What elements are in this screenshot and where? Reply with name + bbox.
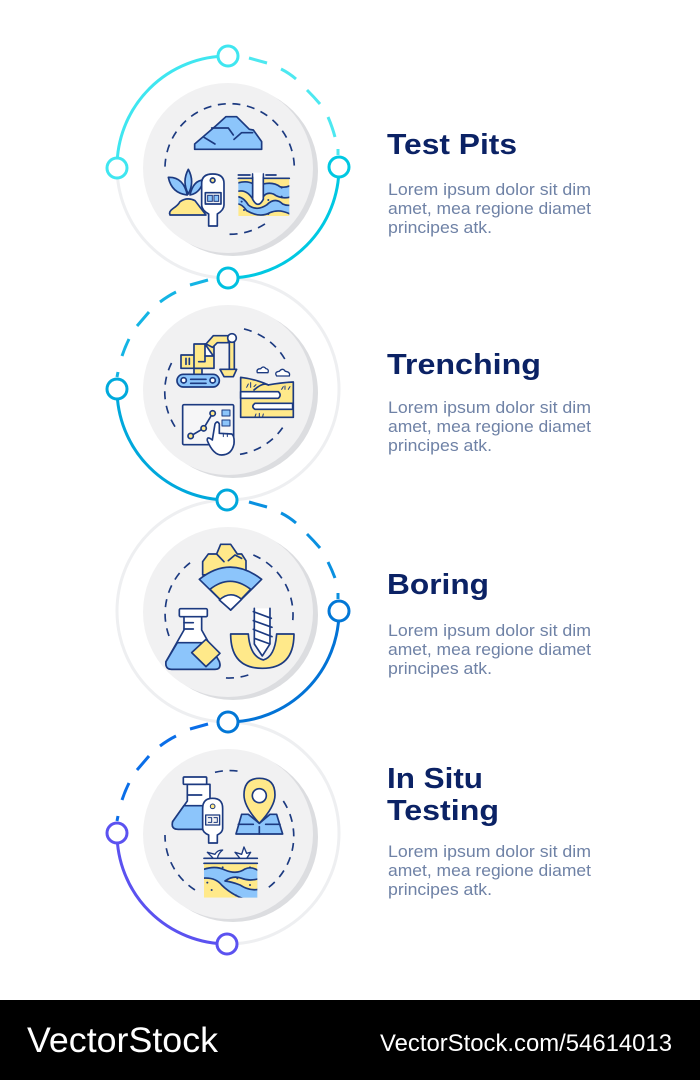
- description: [388, 622, 591, 678]
- icon: drilling and flask: [165, 544, 294, 678]
- heading: Testing: [387, 795, 499, 827]
- footer bar: [0, 1000, 700, 1080]
- icon: field testing kit and location: [165, 771, 294, 900]
- panel: test pits: [107, 46, 591, 278]
- grey disc: [143, 527, 318, 700]
- footer brand: VectorStock: [27, 1021, 219, 1060]
- grey disc: [143, 305, 318, 478]
- description: Lorem ipsum dolor sit dim: [388, 622, 591, 640]
- ring arcs: [117, 280, 228, 500]
- description: [388, 843, 591, 899]
- nodes: [107, 712, 238, 954]
- description: amet, mea regione diamet: [388, 641, 591, 659]
- description: principes atk.: [388, 219, 492, 237]
- icon: soil tests: [165, 104, 294, 234]
- description: Lorem ipsum dolor sit dim: [388, 843, 591, 861]
- grey disc: [143, 749, 318, 922]
- description: [388, 399, 591, 455]
- description: principes atk.: [388, 660, 492, 678]
- ring arcs: [117, 56, 339, 278]
- panel: boring: [143, 490, 591, 722]
- grey disc: [143, 83, 318, 256]
- description: amet, mea regione diamet: [388, 418, 591, 436]
- ring arcs: [117, 724, 228, 944]
- footer url: VectorStock.com/54614013: [380, 1030, 672, 1057]
- heading: [387, 763, 499, 827]
- pale connector rings: [117, 167, 339, 944]
- heading: Trenching: [387, 349, 541, 381]
- nodes: [107, 46, 349, 178]
- description: amet, mea regione diamet: [388, 862, 591, 880]
- icon: excavator, trench and chart: [165, 329, 293, 455]
- description: [388, 181, 591, 237]
- heading: Test Pits: [387, 129, 517, 161]
- heading: In Situ: [387, 763, 483, 795]
- description: principes atk.: [388, 881, 492, 899]
- nodes: [217, 490, 349, 621]
- description: Lorem ipsum dolor sit dim: [388, 181, 591, 199]
- heading: Boring: [387, 569, 489, 601]
- ring arcs: [228, 502, 339, 722]
- description: Lorem ipsum dolor sit dim: [388, 399, 591, 417]
- description: principes atk.: [388, 437, 492, 455]
- nodes: [107, 268, 238, 399]
- description: amet, mea regione diamet: [388, 200, 591, 218]
- panel: in situ testing: [107, 712, 591, 954]
- panel: trenching: [107, 268, 591, 500]
